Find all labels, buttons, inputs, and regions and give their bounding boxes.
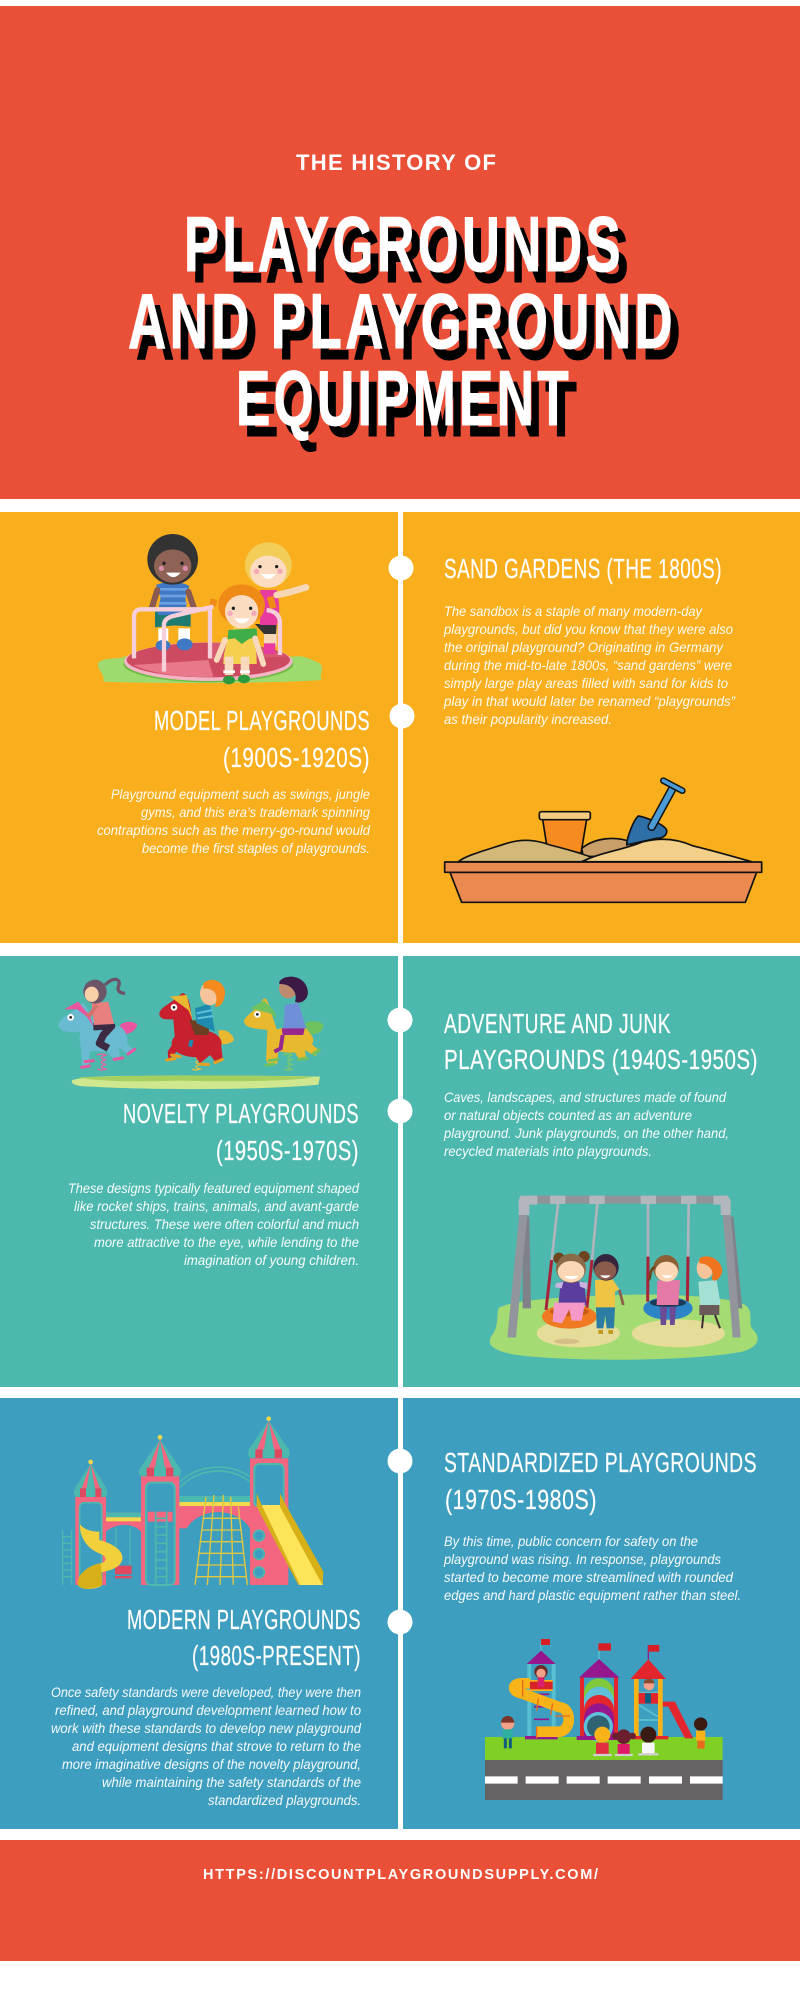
tire right — [643, 1297, 693, 1320]
text: sand gardens body: as their popularity increased. — [444, 711, 612, 727]
illustration: children on tire swings — [490, 1196, 758, 1360]
illustration: children on spring horses — [58, 977, 323, 1089]
footer url: HTTPS://DISCOUNTPLAYGROUNDSUPPLY.COM/ — [203, 1867, 598, 1883]
timeline line — [388, 512, 414, 1829]
text: modern playgrounds body: and equipment designs that strove to return to the — [72, 1738, 361, 1754]
text: adventure body: Caves, landscapes, and structures made of found — [444, 1089, 727, 1105]
illustration: sandbox with bucket and shovel — [445, 781, 762, 902]
main title — [128, 200, 684, 453]
heading: modern playgrounds — [127, 1604, 361, 1671]
main title: EQUIPMENT — [236, 354, 572, 442]
panel: modern playgrounds — [0, 1398, 398, 1829]
text: novelty playgrounds body: These designs typically featured equipment shaped — [68, 1180, 360, 1196]
main title: EQUIPMENT — [244, 365, 580, 453]
kid left — [501, 1717, 514, 1730]
red horse — [218, 1030, 234, 1045]
text: sand gardens body: the original playground? Originating in Germany — [444, 639, 724, 655]
text: standardized body — [443, 1533, 741, 1603]
yellow spiral slide — [514, 1683, 569, 1732]
tire left — [542, 1305, 597, 1329]
text: modern playgrounds body — [51, 1684, 362, 1808]
text: standardized body: playground was rising. In response, playgrounds — [443, 1551, 721, 1567]
text: modern playgrounds body: refined, and playground development learned how to — [55, 1702, 361, 1718]
heading: novelty playgrounds — [123, 1098, 359, 1166]
kids seated — [594, 1727, 610, 1743]
text: model playgrounds body: gyms, and this era’s trademark spinning — [141, 804, 370, 820]
spiral slide — [78, 1524, 122, 1589]
illustration: playground with road — [485, 1639, 723, 1800]
text: sand gardens body: play in that would later be renamed “playgrounds” — [443, 693, 736, 709]
heading: novelty playgrounds: (1950S-1970S) — [216, 1135, 359, 1166]
heading: novelty playgrounds: NOVELTY PLAYGROUNDS — [123, 1098, 359, 1129]
orange girl — [223, 625, 257, 664]
text: adventure body: or natural objects counted as an adventure — [444, 1107, 692, 1123]
timeline dots — [388, 556, 414, 1634]
panel: footer — [0, 1840, 800, 1961]
girl left — [558, 1282, 587, 1305]
text: modern playgrounds body: work with these standards to develop new playground — [51, 1720, 362, 1736]
blond girl — [264, 622, 277, 647]
text: novelty playgrounds body: like rocket ships, trains, animals, and avant-garde — [74, 1198, 359, 1214]
text: novelty playgrounds body: imagination of young children. — [184, 1252, 359, 1268]
straight slide — [257, 1493, 305, 1585]
text: sand gardens body: during the mid-to-late 1800s, “sand gardens” were — [444, 657, 732, 673]
heading: model playgrounds: (1900S-1920S) — [223, 742, 370, 773]
panel: standardized playgrounds — [403, 1398, 800, 1829]
heading: model playgrounds: MODEL PLAYGROUNDS — [154, 705, 370, 736]
text: novelty playgrounds body — [68, 1180, 360, 1268]
text: sand gardens body — [443, 603, 736, 727]
panel: sand gardens — [403, 512, 800, 943]
heading: adventure and junk playgrounds: ADVENTURE AND JUNK — [444, 1008, 671, 1039]
ladders — [63, 1512, 167, 1585]
text: model playgrounds body: become the first staples of playgrounds. — [142, 840, 370, 856]
right circles — [254, 1530, 264, 1541]
upper bridge — [179, 1506, 250, 1528]
text: modern playgrounds body: standardized playgrounds. — [208, 1792, 361, 1808]
text: model playgrounds body: contraptions such as the merry-go-round would — [97, 822, 371, 838]
illustration: castle playground — [63, 1416, 323, 1589]
boy star — [595, 1279, 619, 1307]
boy red hair — [698, 1280, 721, 1305]
text: adventure body: recycled materials into playgrounds. — [444, 1143, 652, 1159]
towers — [75, 1497, 106, 1585]
panel: novelty playgrounds — [0, 956, 398, 1387]
text: sand gardens body: playgrounds, but did you know that they were also — [443, 621, 733, 637]
text: modern playgrounds body: Once safety standards were developed, they were then — [51, 1684, 361, 1700]
heading: modern playgrounds: (1980S-PRESENT) — [192, 1640, 361, 1671]
rope net — [195, 1495, 247, 1585]
tower 1 — [527, 1664, 556, 1737]
tower 3 — [663, 1702, 693, 1738]
rails — [134, 607, 280, 672]
text: sand gardens body: simply large play areas filled with sand for kids to — [444, 675, 728, 691]
subtitle: the history of: THE HISTORY OF — [296, 150, 496, 175]
text: modern playgrounds body: more imaginative designs of the novelty playground, — [62, 1756, 361, 1772]
heading: model playgrounds — [154, 705, 370, 773]
text: standardized body: started to become more streamlined with rounded — [444, 1569, 734, 1585]
text: standardized body: By this time, public concern for safety on the — [444, 1533, 698, 1549]
text: model playgrounds body — [97, 786, 371, 856]
text: sand gardens body: The sandbox is a staple of many modern-day — [444, 603, 703, 619]
text: standardized body: edges and hard plastic equipment rather than steel. — [444, 1587, 741, 1603]
text: modern playgrounds body: while maintaining the safety standards of the — [102, 1774, 361, 1790]
panel: model playgrounds — [0, 512, 398, 943]
frame — [523, 1217, 742, 1308]
text: novelty playgrounds body: more attractive to the eye, while lending to the — [94, 1234, 359, 1250]
illustration: children on merry-go-round — [98, 534, 322, 684]
text: adventure body: playground. Junk playgrounds, on the other hand, — [443, 1125, 729, 1141]
heading: standardized playgrounds — [444, 1447, 757, 1515]
heading: adventure and junk playgrounds — [444, 1008, 758, 1075]
text: novelty playgrounds body: structures. These were often colorful and much — [90, 1216, 359, 1232]
panel: header — [0, 6, 800, 499]
roofs — [75, 1463, 107, 1488]
text: model playgrounds body: Playground equipment such as swings, jungle — [111, 786, 370, 802]
chains — [552, 1204, 689, 1260]
girl right — [657, 1280, 680, 1305]
lower bridge — [106, 1513, 141, 1532]
heading: standardized playgrounds: (1970S-1980S) — [445, 1484, 597, 1515]
kid right — [694, 1717, 707, 1731]
tower 2 arches — [580, 1677, 584, 1737]
panel: adventure and junk playgrounds — [403, 956, 800, 1387]
heading: modern playgrounds: MODERN PLAYGROUNDS — [127, 1604, 361, 1635]
yellow horse — [305, 1021, 323, 1034]
boy — [158, 628, 190, 643]
text: adventure body — [443, 1089, 729, 1159]
blue horse — [120, 1022, 137, 1034]
